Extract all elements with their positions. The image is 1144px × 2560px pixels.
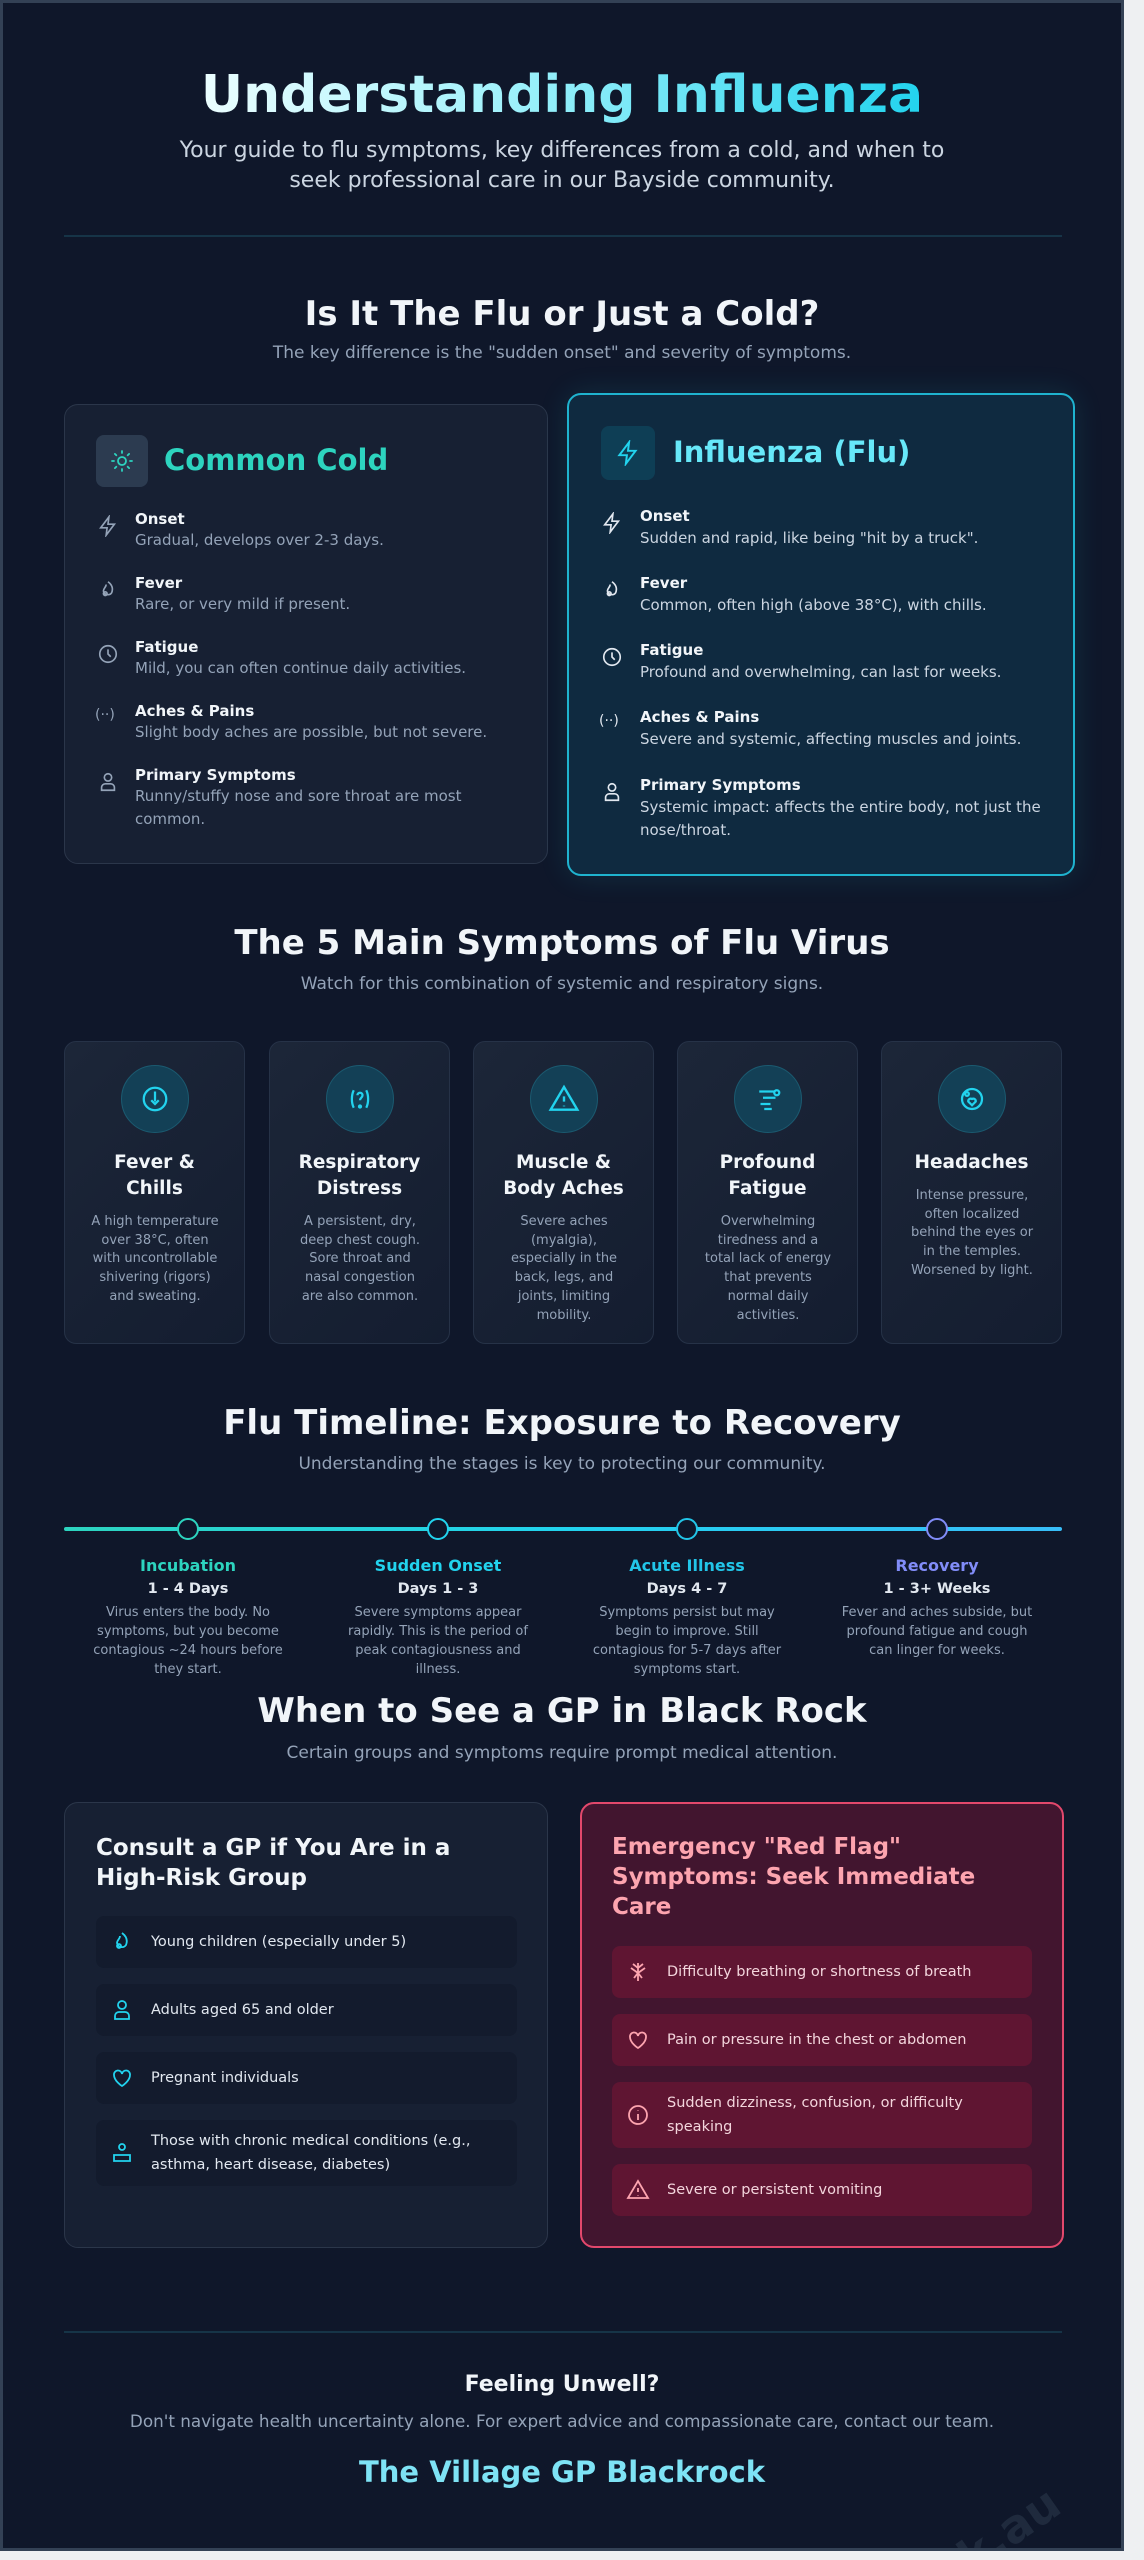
row: dizziness: Sudden dizziness, confusion, or difficulty speaking <box>667 2095 963 2135</box>
item: primary <box>604 776 1041 839</box>
panel: influenza: Sudden and rapid, like being "hit by a truck". <box>640 529 978 547</box>
panel: common cold: Primary Symptoms <box>135 766 296 784</box>
panel: influenza: Common, often high (above 38°C), with chills. <box>640 596 987 614</box>
panel: common cold: Fever <box>135 574 182 592</box>
symptom card: headaches <box>881 1041 1062 1344</box>
symptom card: muscle: Body Aches <box>503 1178 624 1199</box>
footer brand: The Village GP Blackrock <box>359 2455 765 2489</box>
symptom card: fatigue: Fatigue <box>728 1178 807 1199</box>
row: adults 65 <box>96 1984 517 2036</box>
heading: timeline: Flu Timeline: Exposure to Recovery <box>223 1403 901 1443</box>
symptom card: muscle: Severe aches (myalgia), especially in the back, legs, and joints, limiting mobility. <box>511 1214 617 1323</box>
panel: influenza: (··) <box>599 713 619 729</box>
symptom card: fever <box>64 1041 245 1344</box>
stage: incubation <box>93 1556 283 1677</box>
row: chest pain: Pain or pressure in the chest or abdomen <box>667 2032 966 2048</box>
icon: head <box>938 1065 1006 1133</box>
panel title: red flag: Emergency "Red Flag" Symptoms: Seek Immediate Care <box>612 1834 975 1920</box>
row: adults 65: Adults aged 65 and older <box>151 2002 334 2018</box>
footer text: Don't navigate health uncertainty alone. For expert advice and compassionate care, contact our team. <box>130 2411 994 2431</box>
footer heading: Feeling Unwell? <box>465 2372 659 2397</box>
panel: red flag <box>580 1802 1064 2248</box>
stage: recovery: Fever and aches subside, but profound fatigue and cough can linger for weeks. <box>842 1605 1032 1658</box>
stage: recovery: 1 - 3+ Weeks <box>884 1581 990 1597</box>
panel: influenza: Fatigue <box>640 641 703 659</box>
item: onset <box>99 510 384 549</box>
heading: 5 main symptoms: The 5 Main Symptoms of Flu Virus <box>234 923 890 963</box>
stage: acute illness: Days 4 - 7 <box>647 1581 727 1597</box>
timeline <box>64 1527 1062 1531</box>
stage: incubation: Virus enters the body. No symptoms, but you become contagious ~24 hours before they start. <box>93 1605 283 1677</box>
stage: sudden onset: Days 1 - 3 <box>398 1581 478 1597</box>
row: chest pain <box>612 2014 1032 2066</box>
stage: incubation: 1 - 4 Days <box>148 1581 228 1597</box>
panel: high-risk group <box>64 1802 548 2248</box>
panel: common cold <box>64 404 548 864</box>
icon: fatigue <box>734 1065 802 1133</box>
panel: common cold: Aches & Pains <box>135 702 254 720</box>
icon: warning <box>530 1065 598 1133</box>
stage: acute illness: Acute Illness <box>629 1556 745 1575</box>
card title: influenza: Influenza (Flu) <box>673 435 910 469</box>
item: fatigue <box>602 641 1001 681</box>
panel: influenza: Aches & Pains <box>640 708 759 726</box>
subtitle: Your guide to flu symptoms, key differences from a cold, and when to seek professional care in our Bayside community. <box>180 138 944 193</box>
item: aches <box>599 708 1021 748</box>
item: onset <box>603 507 978 547</box>
stage: sudden onset: Severe symptoms appear rapidly. This is the period of peak contagiousness and illness. <box>348 1605 528 1677</box>
subheading: flu or cold: The key difference is the "sudden onset" and severity of symptoms. <box>273 343 851 363</box>
panel: common cold: (··) <box>95 707 115 723</box>
symptom card: respiratory: Respiratory <box>299 1152 420 1173</box>
subheading: GP: Certain groups and symptoms require prompt medical attention. <box>287 1743 837 1763</box>
symptom card: fatigue: Profound <box>720 1152 815 1173</box>
symptom card: fever: Chills <box>126 1178 183 1199</box>
symptom card: respiratory: A persistent, dry, deep chest cough. Sore throat and nasal congestion are also common. <box>300 1214 420 1304</box>
row: chronic conditions: Those with chronic medical conditions (e.g., asthma, heart disease, diabetes) <box>151 2133 470 2173</box>
icon: lightning <box>601 426 655 480</box>
panel: common cold: Rare, or very mild if present. <box>135 595 350 613</box>
row: vomiting: Severe or persistent vomiting <box>667 2182 882 2198</box>
panel: influenza <box>567 393 1075 876</box>
heading: when to see GP: When to See a GP in Black Rock <box>257 1691 867 1731</box>
item: aches <box>95 702 487 741</box>
stage: sudden onset: Sudden Onset <box>375 1556 501 1575</box>
subheading: timeline: Understanding the stages is key to protecting our community. <box>298 1454 826 1474</box>
panel: common cold: Gradual, develops over 2-3 days. <box>135 531 384 549</box>
item: fever <box>102 574 350 613</box>
panel: common cold: Mild, you can often continue daily activities. <box>135 659 466 677</box>
row: young children <box>96 1916 517 1968</box>
panel: common cold: Runny/stuffy nose and sore throat are most common. <box>135 787 461 828</box>
item: primary <box>100 766 462 828</box>
panel: influenza: Fever <box>640 574 687 592</box>
panel title: high risk: Consult a GP if You Are in a High-Risk Group <box>96 1835 450 1891</box>
panel: influenza: Systemic impact: affects the entire body, not just the nose/throat. <box>640 798 1041 839</box>
panel: influenza: Primary Symptoms <box>640 776 801 794</box>
symptom card: headaches: Headaches <box>915 1152 1028 1173</box>
row: dizziness <box>612 2082 1032 2148</box>
stage: acute illness <box>593 1556 782 1677</box>
panel: influenza: Severe and systemic, affecting muscles and joints. <box>640 730 1021 748</box>
icon: thermometer <box>121 1065 189 1133</box>
stage: recovery: Recovery <box>895 1556 979 1575</box>
icon: sun <box>96 435 148 487</box>
row: pregnant <box>96 2052 517 2104</box>
symptom card: respiratory <box>269 1041 450 1344</box>
stage: sudden onset <box>348 1556 528 1677</box>
symptom card: muscle: Muscle & <box>516 1152 611 1173</box>
panel: influenza: Onset <box>640 507 690 525</box>
symptom card: fever: A high temperature over 38°C, often with uncontrollable shivering (rigors) and sweating. <box>91 1214 219 1304</box>
stage: recovery <box>842 1556 1032 1658</box>
panel: common cold: Slight body aches are possible, but not severe. <box>135 723 487 741</box>
symptom card: muscle <box>473 1041 654 1344</box>
symptom card: fever: Fever & <box>114 1152 195 1173</box>
panel: common cold: Onset <box>135 510 185 528</box>
icon: respiratory <box>326 1065 394 1133</box>
symptom card: headaches: Intense pressure, often localized behind the eyes or in the temples. Worsened by light. <box>911 1188 1033 1278</box>
stage: acute illness: Symptoms persist but may begin to improve. Still contagious for 5-7 days after symptoms start. <box>593 1605 781 1677</box>
stage: incubation: Incubation <box>140 1556 236 1575</box>
subheading: symptoms: Watch for this combination of systemic and respiratory signs. <box>301 974 823 994</box>
panel: common cold: Fatigue <box>135 638 198 656</box>
symptom card: respiratory: Distress <box>317 1178 402 1199</box>
title: Understanding Influenza <box>201 65 923 125</box>
symptom card: fatigue <box>677 1041 858 1344</box>
row: chronic conditions <box>96 2120 517 2186</box>
row: vomiting <box>612 2164 1032 2216</box>
item: fatigue <box>98 638 466 677</box>
row: young children: Young children (especially under 5) <box>151 1934 406 1950</box>
row: pregnant: Pregnant individuals <box>151 2070 299 2086</box>
row: breathing: Difficulty breathing or shortness of breath <box>667 1964 972 1980</box>
card title: common cold: Common Cold <box>164 443 388 477</box>
symptom card: fatigue: Overwhelming tiredness and a total lack of energy that prevents normal daily activities. <box>705 1214 831 1323</box>
panel: influenza: Profound and overwhelming, can last for weeks. <box>640 663 1001 681</box>
heading: flu or cold: Is It The Flu or Just a Cold? <box>305 294 819 334</box>
item: fever <box>606 574 987 614</box>
row: breathing <box>612 1946 1032 1998</box>
